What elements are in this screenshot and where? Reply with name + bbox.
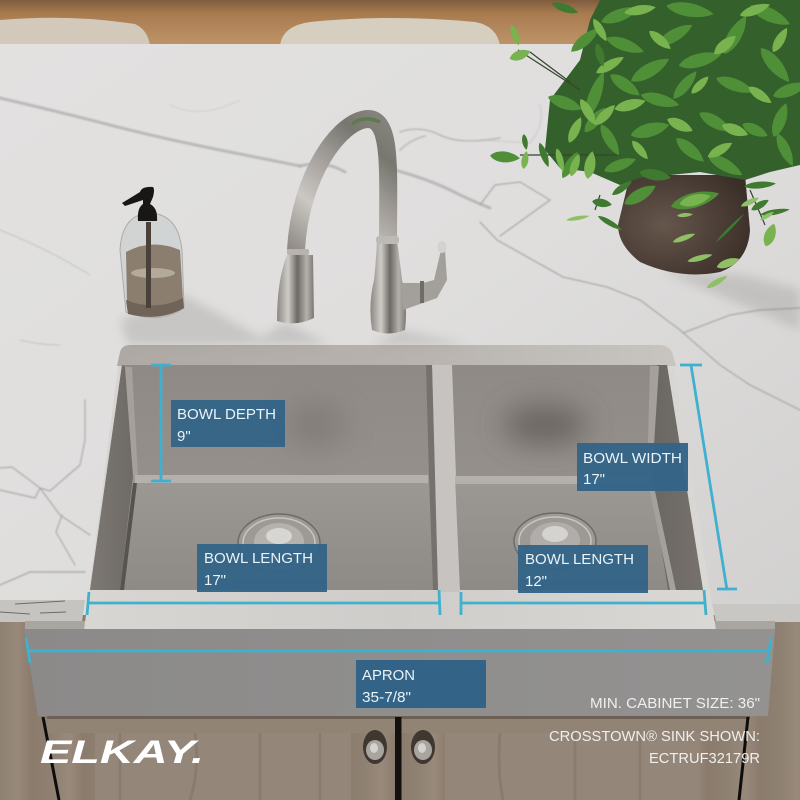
countertop: marble with veins bbox=[0, 44, 800, 606]
label: bowl depth: 9" bbox=[177, 428, 191, 445]
label: right bowl length: 12" bbox=[525, 573, 547, 590]
label: left bowl length: BOWL LENGTH bbox=[204, 550, 313, 567]
drain: right bbox=[514, 513, 596, 569]
dimension lines bbox=[26, 365, 771, 663]
label: bowl depth: BOWL DEPTH bbox=[177, 406, 276, 423]
background: wood wall and chairs bbox=[0, 0, 800, 46]
label: apron: 35-7/8" bbox=[362, 689, 411, 706]
drain: left bbox=[238, 514, 320, 572]
label: apron: APRON bbox=[362, 667, 415, 684]
note: model shown: CROSSTOWN® SINK SHOWN: bbox=[549, 729, 760, 745]
soap dispenser bbox=[120, 187, 184, 318]
plant pot bbox=[618, 175, 750, 274]
cabinet base with doors and knobs bbox=[0, 615, 800, 800]
label: apron bbox=[356, 660, 486, 708]
dimension: right bowl length bbox=[461, 590, 706, 615]
dimension: apron bbox=[26, 638, 771, 663]
faucet bbox=[277, 119, 447, 334]
label: bowl width: 17" bbox=[583, 471, 605, 488]
potted plant bbox=[490, 0, 800, 290]
note: minimum cabinet size: MIN. CABINET SIZE: 36" bbox=[590, 696, 760, 712]
label: left bowl length bbox=[197, 544, 327, 592]
dimension: bowl depth bbox=[151, 365, 171, 481]
label: right bowl length bbox=[518, 545, 648, 593]
sink: left bowl bbox=[90, 365, 438, 590]
countertop front edge bbox=[0, 600, 800, 630]
sink: right bowl bbox=[452, 365, 703, 590]
shadows on countertop bbox=[120, 270, 800, 345]
logo: Elkay: ELKAY. bbox=[40, 734, 204, 770]
apron front panel bbox=[24, 629, 775, 716]
dimension: left bowl length bbox=[87, 590, 440, 615]
foliage bbox=[490, 0, 800, 290]
sink: deck and rim bbox=[84, 345, 716, 630]
label: bowl width bbox=[577, 443, 688, 491]
note: model shown: ECTRUF32179R bbox=[649, 751, 760, 767]
label: bowl depth bbox=[171, 400, 285, 447]
note: model shown bbox=[549, 729, 760, 767]
dimension: bowl width bbox=[680, 365, 737, 590]
label: right bowl length: BOWL LENGTH bbox=[525, 551, 634, 568]
label: bowl width: BOWL WIDTH bbox=[583, 450, 682, 467]
label: left bowl length: 17" bbox=[204, 572, 226, 589]
